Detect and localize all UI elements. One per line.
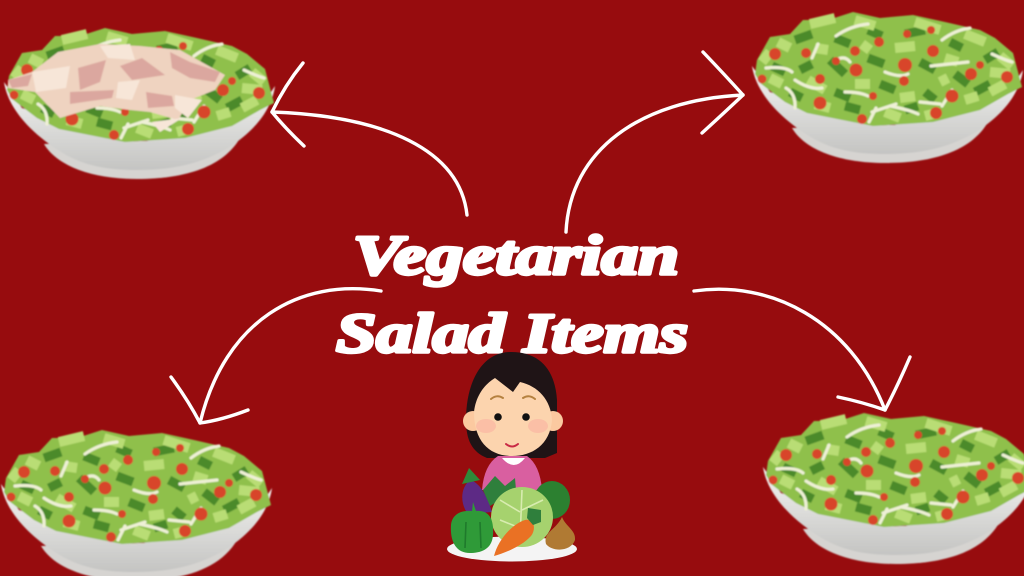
broccoli bbox=[534, 481, 570, 519]
salad bowl: top left with ham bbox=[4, 28, 275, 179]
illustration: woman with vegetables bbox=[447, 352, 577, 562]
salad bowl: bottom right bbox=[763, 413, 1024, 564]
carrot bbox=[494, 520, 534, 556]
arrow: to bottom left bowl bbox=[171, 289, 381, 423]
salad bowl: top right bbox=[752, 12, 1023, 163]
onion bbox=[546, 517, 575, 550]
arrow: to top right bowl bbox=[566, 52, 743, 232]
leafy greens bbox=[483, 476, 516, 506]
arrow: to bottom right bowl bbox=[694, 289, 910, 410]
salad bowl: bottom left bbox=[1, 430, 272, 576]
cabbage bbox=[491, 487, 553, 547]
title: Salad Items bbox=[336, 303, 688, 365]
hair bbox=[466, 352, 557, 458]
arrow: to top left bowl bbox=[272, 63, 467, 215]
face bbox=[463, 378, 563, 456]
body bbox=[482, 456, 542, 490]
bell pepper bbox=[451, 502, 493, 553]
title: Vegetarian bbox=[353, 225, 679, 287]
title bbox=[336, 225, 688, 365]
plate bbox=[447, 536, 577, 562]
eggplant bbox=[462, 480, 492, 514]
